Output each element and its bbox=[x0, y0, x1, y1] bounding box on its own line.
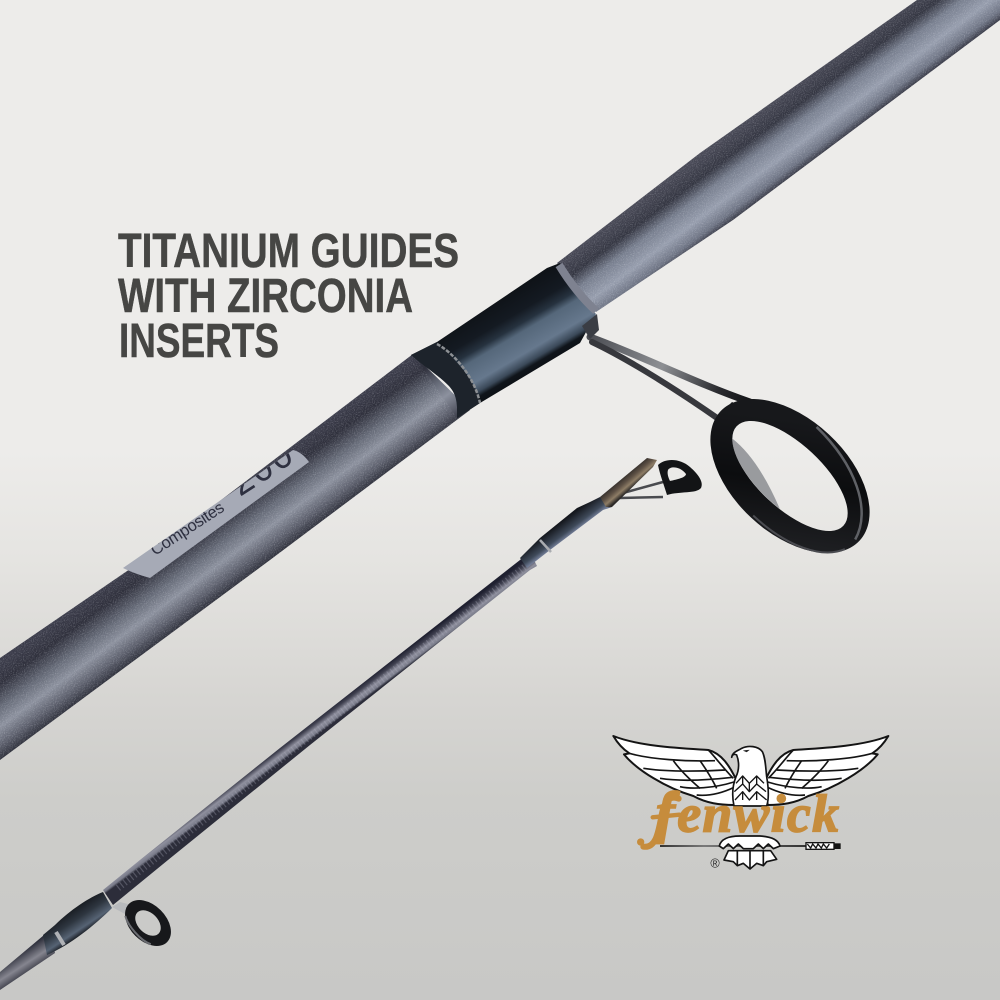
wordmark f swash bbox=[638, 798, 679, 847]
trim band bbox=[437, 344, 480, 403]
ring lower rim highlight bbox=[753, 488, 845, 577]
guide frame legs bbox=[590, 337, 750, 420]
heading: titanium guides with zirconia inserts: WITH ZIRCONIA bbox=[118, 270, 413, 323]
grain marks along blank bbox=[118, 566, 526, 888]
right wing bbox=[766, 736, 888, 805]
tip frame legs bbox=[620, 482, 663, 498]
thin rod section with tip bbox=[0, 458, 702, 990]
heading: titanium guides with zirconia inserts: TITANIUM GUIDES bbox=[118, 225, 459, 278]
logo rod and handle bbox=[660, 843, 841, 849]
wrap dark trim zone bbox=[411, 342, 480, 418]
logo wordmark: enwick bbox=[677, 784, 840, 844]
heading: titanium guides with zirconia inserts bbox=[118, 225, 459, 368]
small wrap band bbox=[56, 932, 64, 945]
registered mark: ® bbox=[710, 856, 720, 870]
ring rim highlight bbox=[778, 427, 893, 540]
thin blank bbox=[103, 552, 537, 905]
tip wrap bbox=[520, 497, 612, 568]
left wing bbox=[613, 736, 736, 805]
tip tube bbox=[600, 458, 657, 507]
guide foot bbox=[582, 314, 599, 339]
rod blank upper section bbox=[557, 0, 1000, 312]
plate label on rod bbox=[123, 450, 309, 578]
butt section blank bbox=[0, 930, 55, 990]
wrap end band bbox=[559, 265, 596, 311]
guide ring bbox=[682, 370, 898, 582]
plate text: Composites: Composites bbox=[147, 499, 228, 559]
logo wordmark: f bbox=[656, 783, 680, 845]
zirconia insert bbox=[719, 438, 793, 509]
eagle talons and tail bbox=[719, 836, 780, 869]
rod blank lower section bbox=[0, 354, 470, 760]
grain texture on blank bbox=[0, 0, 1000, 770]
small guide ring bbox=[112, 891, 180, 955]
eagle head and chest bbox=[732, 746, 768, 806]
fenwick logo bbox=[613, 736, 888, 870]
tip guide loop bbox=[658, 460, 702, 495]
thread wrap bbox=[411, 263, 596, 418]
small wrap bbox=[43, 892, 112, 955]
tip band bbox=[540, 540, 551, 552]
large rod section with guide bbox=[0, 0, 1000, 770]
ring neck bbox=[720, 402, 745, 425]
plate text: 200: 200 bbox=[222, 432, 302, 504]
heading: titanium guides with zirconia inserts: INSERTS bbox=[119, 315, 279, 368]
